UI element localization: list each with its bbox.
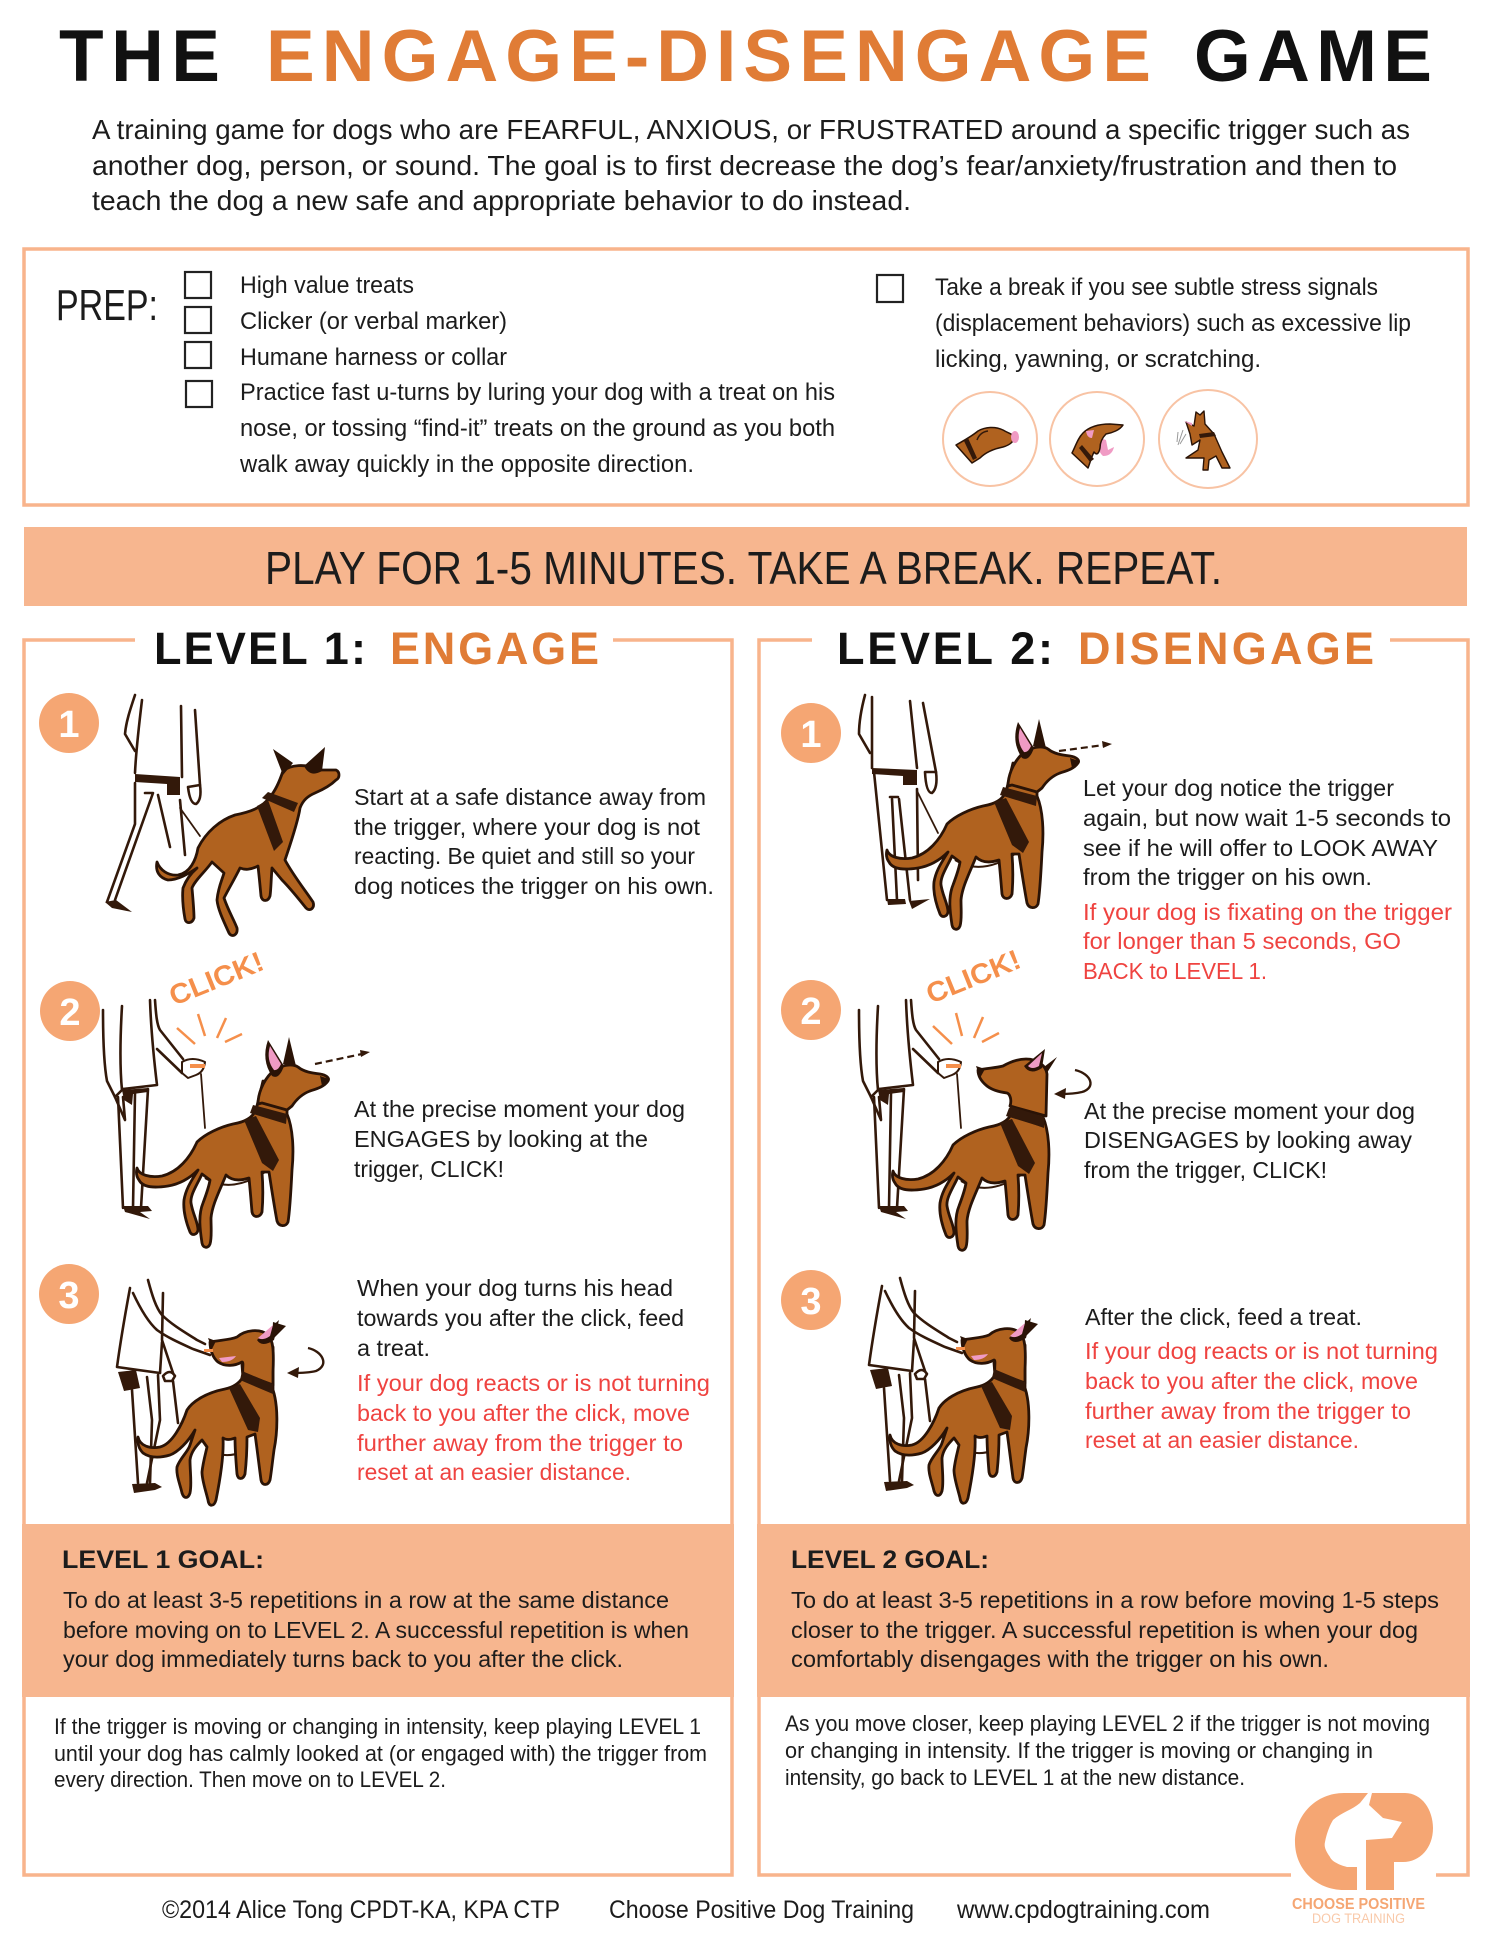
- click label: CLICK!: [165, 946, 268, 1012]
- step 1 text: again, but now wait 1-5 seconds to: [1083, 805, 1451, 831]
- level 2 heading: DISENGAGE: [1078, 623, 1374, 674]
- level 2 goal band: comfortably disengages with the trigger on his own.: [791, 1646, 1329, 1672]
- step 2 text: At the precise moment your dog: [1084, 1098, 1415, 1124]
- step 3 text: back to you after the click, move: [1085, 1368, 1418, 1394]
- step 3 text: a treat.: [357, 1335, 430, 1361]
- step 1 text: reacting. Be quiet and still so your: [354, 843, 695, 869]
- stress signals note: (displacement behaviors) such as excessive lip: [935, 310, 1411, 337]
- level 1 note: [54, 1714, 707, 1792]
- level 1 heading: ENGAGE: [390, 623, 599, 674]
- logo: choose positive dog training: DOG TRAINING: [1312, 1911, 1405, 1926]
- click label: [165, 946, 268, 1044]
- icon: dog yawning: [1050, 392, 1144, 486]
- step 1 text: the trigger, where your dog is not: [354, 814, 700, 840]
- step 1 number: [781, 703, 841, 763]
- panel: level 2 disengage: [757, 623, 1470, 1875]
- level 1 note: If the trigger is moving or changing in intensity, keep playing LEVEL 1: [54, 1714, 701, 1739]
- step 3 text: [357, 1275, 710, 1485]
- level 2 note: [785, 1711, 1430, 1790]
- step 3 illustration: man feeding treat: [869, 1278, 1038, 1503]
- step 2 illustration: man clicking, dog engaging: [103, 1000, 370, 1247]
- title: GAME: [1194, 16, 1432, 97]
- footer credits: Choose Positive Dog Training: [609, 1896, 914, 1924]
- level 1 goal band: your dog immediately turns back to you after the click.: [63, 1646, 623, 1672]
- step 2 text: ENGAGES by looking at the: [354, 1126, 648, 1152]
- level 2 note: intensity, go back to LEVEL 1 at the new distance.: [785, 1765, 1245, 1790]
- step 3 illustration: man feeding treat: [117, 1280, 323, 1505]
- prep checklist: walk away quickly in the opposite direction.: [239, 451, 694, 478]
- step 3 number: 3: [800, 1281, 822, 1323]
- title: ENGAGE-DISENGAGE: [266, 16, 1151, 97]
- step 1 illustration: man and dog walking: [105, 695, 339, 935]
- step 2 text: trigger, CLICK!: [354, 1156, 504, 1182]
- step 1 text: see if he will offer to LOOK AWAY: [1083, 835, 1438, 861]
- level 1 note: until your dog has calmly looked at (or engaged with) the trigger from: [54, 1741, 707, 1766]
- step 3 text: reset at an easier distance.: [1085, 1427, 1359, 1453]
- step 3 text: towards you after the click, feed: [357, 1305, 684, 1331]
- step 1 text: Let your dog notice the trigger: [1083, 775, 1394, 801]
- step 3 text: further away from the trigger to: [1085, 1398, 1411, 1424]
- step 2 text: [354, 1096, 685, 1182]
- step 3 text: If your dog reacts or is not turning: [357, 1370, 710, 1396]
- intro text: another dog, person, or sound. The goal is to first decrease the dog’s fear/anxiety/frustration and then to: [92, 150, 1397, 181]
- stress signals note: [877, 274, 1411, 373]
- step 1 text: Start at a safe distance away from: [354, 784, 706, 810]
- step 3 number: [781, 1270, 841, 1330]
- level 2 heading: [837, 623, 1374, 674]
- level 2 goal band: [757, 1524, 1470, 1697]
- step 2 text: DISENGAGES by looking away: [1084, 1127, 1412, 1153]
- step 3 text: [1085, 1304, 1438, 1453]
- title: THE: [59, 16, 220, 97]
- click label: CLICK!: [922, 944, 1025, 1010]
- step 1 number: [39, 693, 99, 753]
- step 3 text: further away from the trigger to: [357, 1430, 683, 1456]
- stress signals note: Take a break if you see subtle stress signals: [935, 274, 1378, 301]
- step 2 number: 2: [800, 991, 822, 1033]
- logo: choose positive dog training: CHOOSE POSITIVE: [1292, 1896, 1425, 1913]
- step 2 illustration: man clicking, dog disengaging: [859, 1000, 1090, 1250]
- prep checklist: Clicker (or verbal marker): [240, 308, 507, 335]
- prep checklist: Practice fast u-turns by luring your dog with a treat on his: [240, 379, 835, 406]
- step 3 text: When your dog turns his head: [357, 1275, 673, 1301]
- level 2 note: or changing in intensity. If the trigger is moving or changing in: [785, 1738, 1373, 1763]
- logo: choose positive dog training: [1292, 1793, 1433, 1926]
- intro text: teach the dog a new safe and appropriate behavior to do instead.: [92, 185, 911, 216]
- step 3 text: back to you after the click, move: [357, 1400, 690, 1426]
- step 2 number: [781, 980, 841, 1040]
- step 2 text: [1084, 1098, 1415, 1183]
- level 1 note: every direction. Then move on to LEVEL 2.: [54, 1767, 446, 1792]
- step 1 text: [354, 784, 714, 899]
- level 2 goal band: closer to the trigger. A successful repetition is when your dog: [791, 1617, 1418, 1643]
- title: [59, 16, 1432, 97]
- step 2 number: 2: [59, 992, 81, 1034]
- step 1 text: BACK to LEVEL 1.: [1083, 958, 1267, 984]
- level 1 goal band: [22, 1524, 734, 1697]
- banner: PLAY FOR 1-5 MINUTES. TAKE A BREAK. REPEAT.: [265, 542, 1222, 594]
- step 1 illustration: man and dog noticing trigger: [859, 695, 1112, 929]
- step 1 number: 1: [800, 714, 822, 756]
- step 2 text: At the precise moment your dog: [354, 1096, 685, 1122]
- step 1 text: If your dog is fixating on the trigger: [1083, 899, 1452, 925]
- step 1 text: from the trigger on his own.: [1083, 864, 1372, 890]
- footer credits: www.cpdogtraining.com: [956, 1896, 1210, 1924]
- intro text: [92, 114, 1410, 216]
- prep checklist: Humane harness or collar: [240, 344, 507, 371]
- prep checklist: nose, or tossing “find-it” treats on the ground as you both: [240, 415, 835, 442]
- prep checklist: [185, 272, 835, 478]
- level 1 heading: [154, 623, 599, 674]
- footer credits: ©2014 Alice Tong CPDT-KA, KPA CTP: [162, 1896, 560, 1924]
- step 3 text: If your dog reacts or is not turning: [1085, 1338, 1438, 1364]
- level 1 heading: LEVEL 1:: [154, 623, 366, 674]
- prep heading: PREP:: [56, 281, 158, 330]
- level 2 note: As you move closer, keep playing LEVEL 2 if the trigger is not moving: [785, 1711, 1430, 1736]
- stress signals note: licking, yawning, or scratching.: [935, 346, 1261, 373]
- step 2 text: from the trigger, CLICK!: [1084, 1157, 1327, 1183]
- level 1 goal band: before moving on to LEVEL 2. A successful repetition is when: [63, 1617, 689, 1643]
- banner: [24, 527, 1467, 606]
- step 1 text: for longer than 5 seconds, GO: [1083, 928, 1401, 954]
- level 2 goal band: To do at least 3-5 repetitions in a row before moving 1-5 steps: [791, 1587, 1439, 1613]
- intro text: A training game for dogs who are FEARFUL, ANXIOUS, or FRUSTRATED around a specific trigger such as: [92, 114, 1410, 145]
- step 1 text: [1083, 775, 1452, 984]
- step 1 number: 1: [58, 704, 80, 746]
- step 3 text: reset at an easier distance.: [357, 1459, 631, 1485]
- icon: dog licking lips: [943, 392, 1037, 486]
- panel: prep: [24, 249, 1468, 505]
- panel: level 1 engage: [22, 623, 734, 1875]
- click label: [922, 944, 1025, 1044]
- level 1 goal band: To do at least 3-5 repetitions in a row at the same distance: [63, 1587, 669, 1613]
- step 2 number: [40, 981, 100, 1041]
- level 2 goal band: LEVEL 2 GOAL:: [791, 1546, 989, 1574]
- icon: dog scratching: [1159, 390, 1257, 488]
- level 2 heading: LEVEL 2:: [837, 623, 1053, 674]
- step 3 number: [39, 1264, 99, 1324]
- step 3 number: 3: [58, 1275, 80, 1317]
- step 1 text: dog notices the trigger on his own.: [354, 873, 714, 899]
- prep checklist: High value treats: [240, 272, 414, 299]
- footer credits: [162, 1896, 1210, 1924]
- step 3 text: After the click, feed a treat.: [1085, 1304, 1362, 1330]
- level 1 goal band: LEVEL 1 GOAL:: [62, 1546, 264, 1574]
